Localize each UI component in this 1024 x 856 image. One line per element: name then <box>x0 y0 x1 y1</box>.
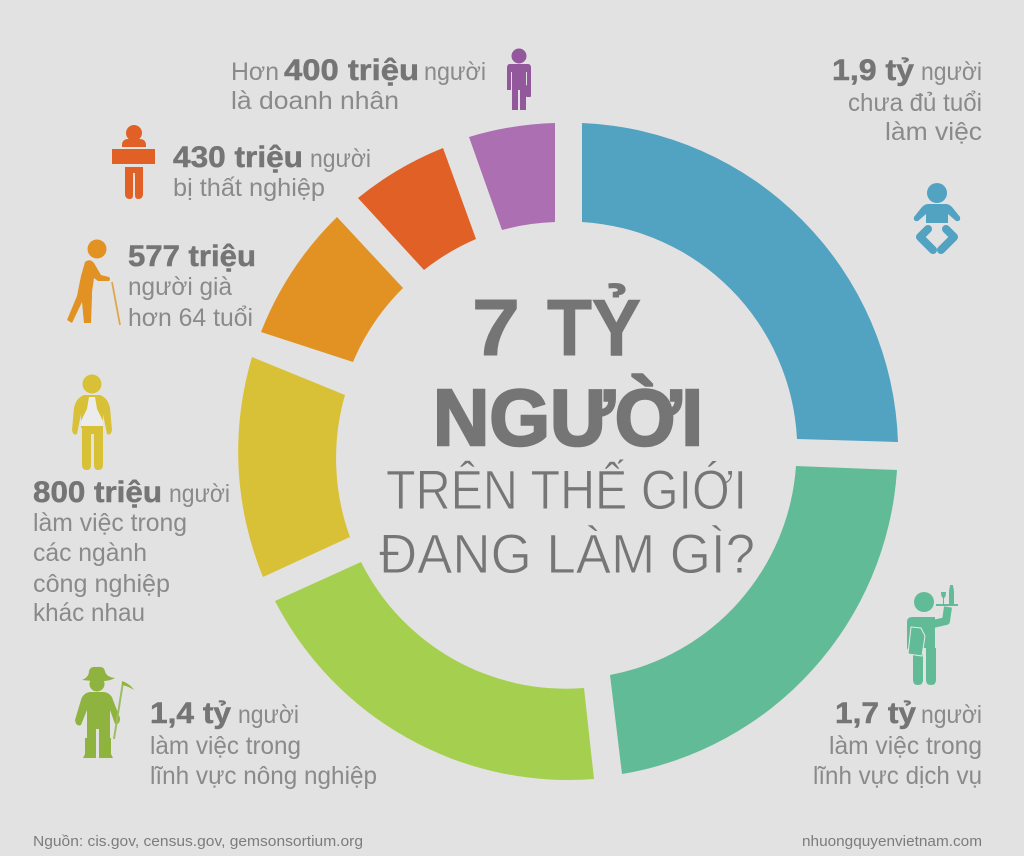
label: services: lĩnh vực dịch vụ <box>813 762 982 790</box>
title line: 7 tỷ: 7 <box>472 283 520 372</box>
label: under working age: người <box>921 58 982 86</box>
title line: trên thế giới: TRÊN THẾ GIỚI <box>386 458 747 521</box>
website: nhuongquyenvietnam.com <box>802 833 982 850</box>
label: elderly <box>128 240 256 332</box>
segment: elderly <box>261 217 403 362</box>
label: elderly: 577 triệu <box>128 240 256 273</box>
label: under working age: 1,9 tỷ <box>832 54 914 87</box>
label: under working age: chưa đủ tuổi <box>848 89 982 117</box>
segment: services <box>610 466 897 774</box>
label: services: người <box>921 701 982 729</box>
label: industry <box>33 476 230 627</box>
label: services: làm việc trong <box>829 732 982 760</box>
label: industry: người <box>169 480 230 508</box>
title line: đang làm gì: ĐANG LÀM GÌ? <box>379 522 755 585</box>
title line: 7 tỷ: TỶ <box>547 283 641 372</box>
label: agriculture: làm việc trong <box>150 732 301 760</box>
label: agriculture: 1,4 tỷ <box>150 697 231 730</box>
label: industry: các ngành <box>33 539 147 567</box>
label: services <box>813 697 982 790</box>
label: elderly: hơn 64 tuổi <box>128 304 253 332</box>
title line: người: NGƯỜI <box>433 373 703 462</box>
label: entrepreneurs <box>231 54 486 115</box>
label: entrepreneurs: 400 triệu <box>284 54 419 87</box>
label: unemployed: bị thất nghiệp <box>173 174 325 202</box>
icon: industrial worker <box>72 374 112 470</box>
source: Nguồn: cis.gov, census.gov, gemsonsortium.org <box>33 833 363 850</box>
donut chart <box>238 123 898 780</box>
label: unemployed: người <box>310 145 371 173</box>
label: under working age: làm việc <box>885 118 982 146</box>
label: services: 1,7 tỷ <box>835 697 916 730</box>
icon: businessman <box>507 48 531 110</box>
segment: industry <box>238 357 350 577</box>
label: industry: khác nhau <box>33 599 145 627</box>
label: agriculture <box>150 697 377 790</box>
icon: baby <box>914 183 960 250</box>
icon: farmer <box>75 667 134 758</box>
label: under working age <box>832 54 982 146</box>
segment: entrepreneurs <box>469 123 555 230</box>
label: entrepreneurs: là doanh nhân <box>231 87 399 115</box>
segment: unemployed <box>358 148 476 270</box>
label: elderly: người già <box>128 273 232 301</box>
icon: unemployed person <box>112 125 155 199</box>
icon: waiter <box>907 585 958 685</box>
label: industry: công nghiệp <box>33 570 170 598</box>
label: agriculture: lĩnh vực nông nghiệp <box>150 762 377 790</box>
title <box>379 283 755 585</box>
label: agriculture: người <box>238 701 299 729</box>
label: unemployed <box>173 141 371 202</box>
label: industry: làm việc trong <box>33 509 187 537</box>
segment: under working age <box>582 123 898 442</box>
label: entrepreneurs: Hơn <box>231 58 279 86</box>
segment: agriculture <box>275 562 594 780</box>
icon: elderly person with cane <box>67 240 120 325</box>
label: industry: 800 triệu <box>33 476 162 509</box>
label: unemployed: 430 triệu <box>173 141 303 174</box>
label: entrepreneurs: người <box>424 58 486 86</box>
